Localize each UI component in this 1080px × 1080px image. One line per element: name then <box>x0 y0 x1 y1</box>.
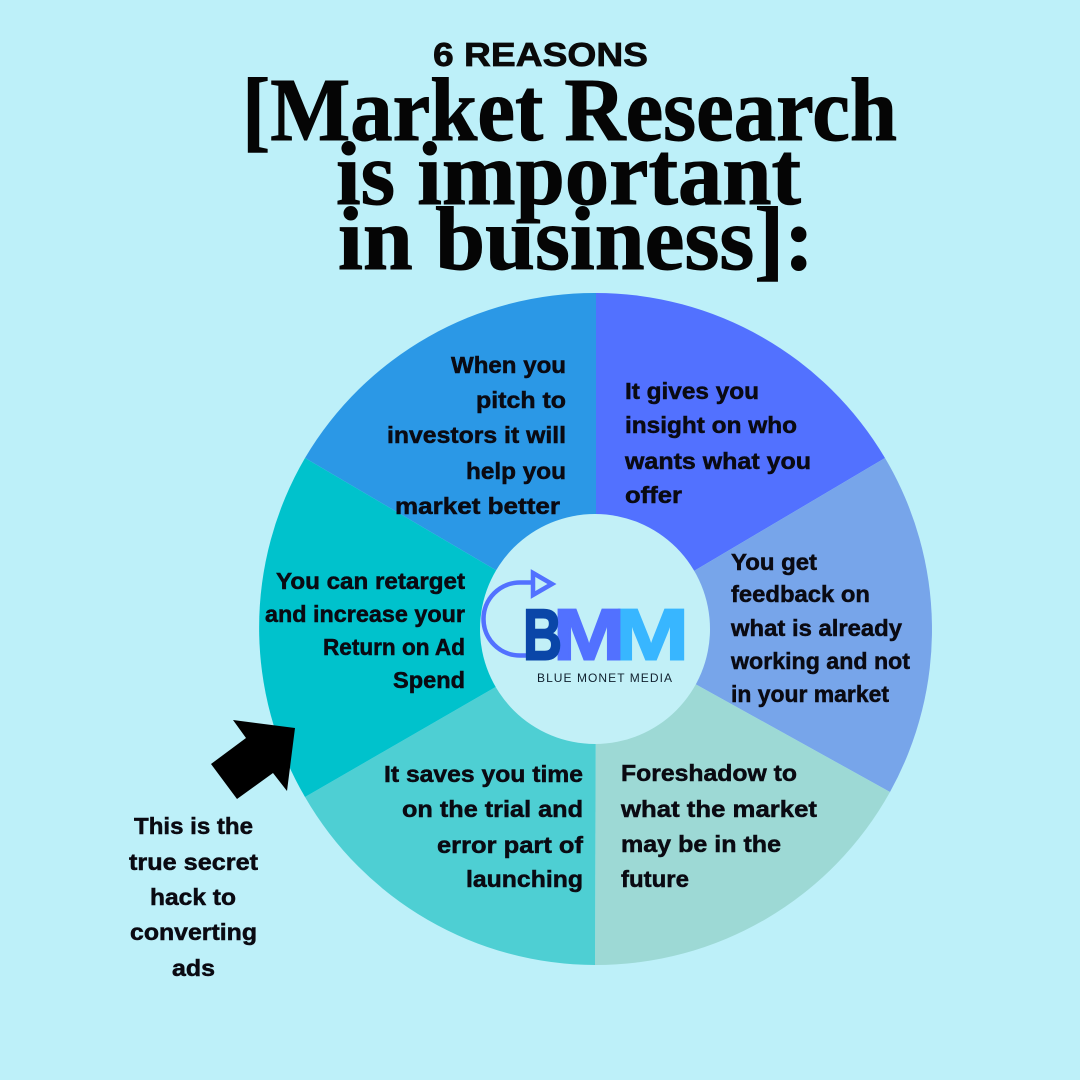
text: feedback: feedback on <box>731 581 870 607</box>
text: investors: investors it will <box>387 422 566 448</box>
text: insight <box>624 378 811 508</box>
segment: bottom right <box>595 629 890 965</box>
text: feedback: in your market <box>731 681 889 707</box>
segment: top left <box>305 293 596 629</box>
logo name: BLUE MONET MEDIA <box>537 671 672 685</box>
text: retarget: You can retarget <box>276 568 465 594</box>
subtitle: 6 reasons: 6 REASONS <box>433 36 648 73</box>
title: is important <box>336 125 801 224</box>
segment: right <box>596 458 932 792</box>
text: retarget: Return on Ad <box>323 634 465 660</box>
text: insight: offer <box>625 482 682 508</box>
callout: This is the <box>134 813 253 839</box>
logo letters <box>523 596 689 676</box>
text: saves time: launching <box>466 866 583 892</box>
callout: ads <box>172 955 215 981</box>
text: investors: When you <box>451 352 566 378</box>
title <box>242 61 897 289</box>
text: foreshadow <box>620 760 817 892</box>
text: feedback: You get <box>731 549 817 575</box>
segment: top right <box>596 293 885 629</box>
callout <box>129 813 258 981</box>
callout: true secret <box>129 849 258 875</box>
text: investors: help you <box>466 458 566 484</box>
text: feedback <box>730 549 910 707</box>
callout: converting <box>130 919 257 945</box>
center circle <box>480 514 710 744</box>
logo letters: M <box>553 596 625 676</box>
text: investors: pitch to <box>476 387 566 413</box>
callout: hack to <box>150 884 236 910</box>
text: retarget: Spend <box>393 667 465 693</box>
text: insight: It gives you <box>625 378 759 404</box>
segment: left <box>259 458 596 797</box>
text: retarget: and increase your <box>265 601 465 627</box>
text: feedback: what is already <box>730 615 902 641</box>
text: feedback: working and not <box>730 648 910 674</box>
text: retarget <box>265 568 465 693</box>
text: investors <box>387 352 566 519</box>
text: insight: wants what you <box>624 448 811 474</box>
text: insight: insight on who <box>625 412 797 438</box>
text: saves time <box>384 761 583 892</box>
text: saves time: error part of <box>437 832 583 858</box>
logo letters: B <box>523 596 562 676</box>
arrow <box>211 720 295 799</box>
logo letters: M <box>613 596 689 676</box>
text: foreshadow: Foreshadow to <box>621 760 797 786</box>
text: saves time: on the trial and <box>402 796 583 822</box>
title: [Market Research <box>242 61 897 160</box>
segment: bottom left <box>305 629 596 965</box>
title: in business]: <box>338 190 814 289</box>
text: saves time: It saves you time <box>384 761 583 787</box>
text: foreshadow: future <box>621 866 689 892</box>
wheel chart <box>259 293 932 965</box>
text: foreshadow: may be in the <box>621 831 781 857</box>
text: foreshadow: what the market <box>620 796 817 822</box>
icon: curved arrow <box>484 573 552 656</box>
logo <box>484 573 689 685</box>
text: investors: market better <box>395 493 560 519</box>
